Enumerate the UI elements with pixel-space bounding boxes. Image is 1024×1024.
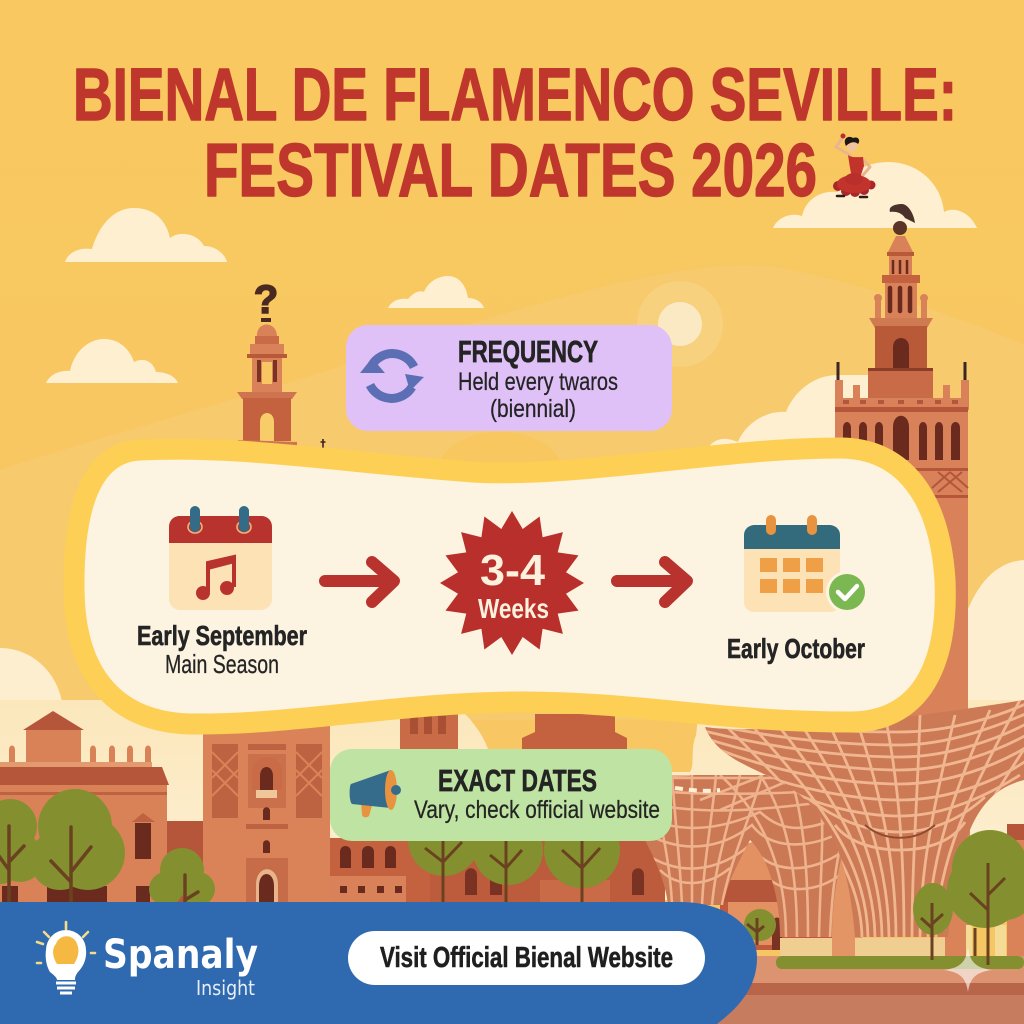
- sparkle watermark: [944, 948, 992, 992]
- frequency text: [458, 334, 618, 423]
- cloud: upper right: [773, 162, 977, 228]
- logo wordmark: [103, 932, 258, 1000]
- small tower left: [237, 278, 326, 450]
- parasol plinths: [780, 938, 945, 956]
- trees right: [744, 830, 1024, 965]
- title: [73, 53, 957, 212]
- panel: exact dates: [330, 749, 672, 841]
- title: FESTIVAL DATES 2026: [204, 128, 817, 212]
- arrow: to end date: [617, 562, 687, 602]
- panel: main timeline: [74, 448, 945, 724]
- skyline: building centre: [330, 712, 665, 902]
- exact dates text: Vary, check official website: [414, 796, 660, 824]
- frequency text: FREQUENCY: [458, 334, 598, 369]
- badge: 3-4 weeks: [440, 511, 584, 655]
- exact dates text: [414, 763, 660, 824]
- trees centre: [408, 804, 620, 902]
- right ground buildings: [720, 824, 1024, 956]
- cloud and cream skyline backdrop: [0, 560, 1024, 905]
- icon: refresh cycle: [360, 354, 424, 398]
- logo wordmark: Insight: [196, 976, 255, 1000]
- arrow: to duration: [325, 562, 394, 602]
- logo: light bulb: [37, 922, 95, 993]
- frequency text: Held every twaros: [458, 368, 618, 396]
- small tower left: ?: [254, 278, 278, 322]
- cloud: upper left: [65, 208, 227, 262]
- frequency text: (biennial): [490, 395, 576, 423]
- panel: frequency: [346, 325, 672, 431]
- Metropol Parasol secondary: [640, 775, 850, 937]
- flamenco dancer icon: [833, 134, 876, 197]
- cloud: behind tower: [708, 375, 880, 450]
- Metropol Parasol main: [700, 700, 1024, 940]
- skyline: building left: [0, 711, 169, 902]
- Giralda tower right: [835, 204, 969, 738]
- ground: [700, 956, 1024, 1024]
- logo wordmark: Spanaly: [103, 932, 258, 978]
- label: early october: Early October: [727, 633, 865, 664]
- label: early september: Main Season: [165, 649, 279, 679]
- exact dates text: EXACT DATES: [438, 763, 597, 798]
- background hills: [0, 266, 1024, 720]
- icon: megaphone: [350, 770, 401, 817]
- trees left: [0, 789, 215, 906]
- label: early september: Early September: [137, 620, 307, 651]
- button: visit website: Visit Official Bienal Website: [380, 942, 673, 974]
- button: visit website: [348, 931, 705, 985]
- icon: calendar with music note: [169, 506, 272, 610]
- label: early september: [137, 620, 307, 679]
- badge: 3-4 weeks: 3-4: [480, 546, 546, 595]
- sun: [637, 281, 723, 367]
- skyline: central tower: [203, 722, 330, 902]
- skyline: connecting wall: [167, 821, 203, 902]
- badge: 3-4 weeks: Weeks: [478, 593, 549, 624]
- footer band: [0, 902, 757, 1024]
- cloud: mid left: [46, 339, 178, 383]
- icon: calendar with check: [744, 515, 868, 613]
- cloud: centre: [388, 276, 484, 308]
